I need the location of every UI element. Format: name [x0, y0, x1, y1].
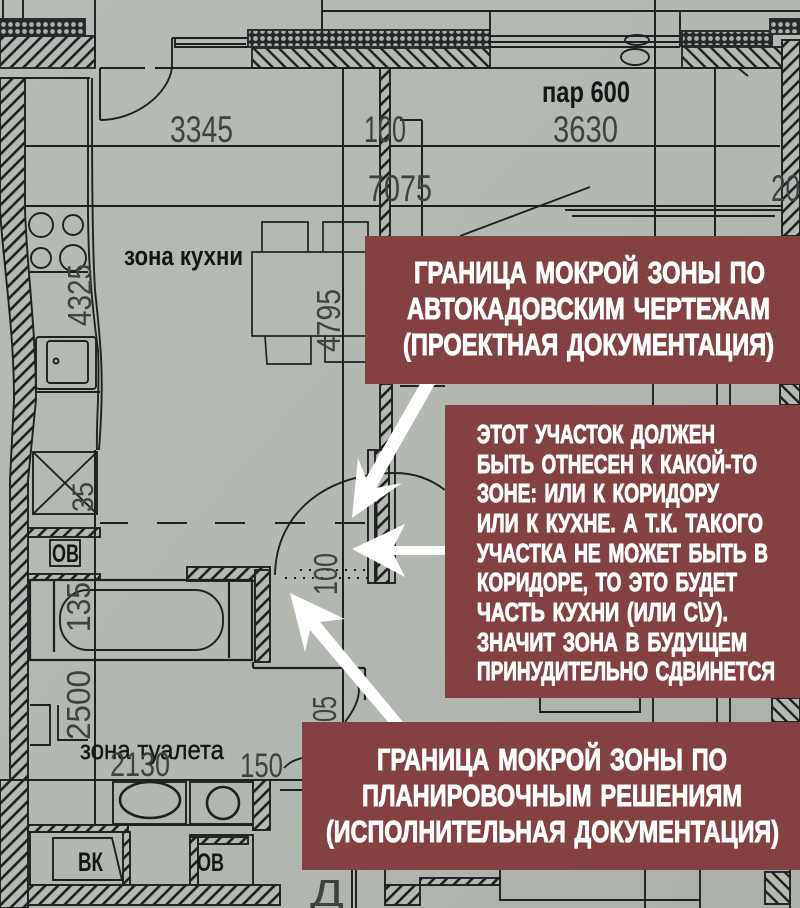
- dimension: 4325 vertical: 4325: [61, 264, 98, 326]
- callout: middle box: [445, 405, 800, 698]
- arrow: lower, to planning boundary: [290, 593, 403, 722]
- callout: middle box: ЗОНЕ: ИЛИ К КОРИДОРУ: [477, 480, 720, 508]
- bathroom fixtures: [0, 450, 365, 908]
- label: зона туалета: зона туалета: [80, 735, 225, 765]
- label: ВК: ВК: [78, 847, 103, 877]
- arrow: middle, to the disputed area: [352, 524, 445, 577]
- door arc top: [100, 38, 172, 120]
- dimension: 2500 vertical: 2500: [60, 670, 97, 740]
- right wall: [782, 40, 800, 236]
- dimension: 3345: 3345: [170, 109, 233, 150]
- dimension: 05 vertical: 05: [306, 696, 343, 722]
- callout: middle box: ЧАСТЬ КУХНИ (ИЛИ С\У).: [477, 599, 728, 627]
- dimension: 7075: 7075: [368, 168, 432, 209]
- dimension: 100 vertical: 100: [307, 553, 344, 595]
- central wall: [368, 384, 395, 583]
- label: зона кухни: зона кухни: [124, 241, 243, 271]
- dimension lines: [25, 146, 800, 206]
- callout: top box: [365, 236, 800, 384]
- left curved wall and kitchen counter: [0, 68, 102, 780]
- top walls: [0, 0, 800, 68]
- label: пар 600: пар 600: [542, 76, 630, 109]
- table and chairs: [252, 222, 382, 364]
- lower right plan fragments: [280, 384, 800, 908]
- label: ОВ lower: ОВ: [197, 849, 224, 877]
- door arc bath: [275, 473, 445, 575]
- label: ОВ upper: ОВ: [52, 540, 79, 568]
- callout: middle box: ЭТОТ УЧАСТОК ДОЛЖЕН: [477, 421, 715, 449]
- callout: bottom box: [302, 722, 800, 870]
- dashed zone line: [100, 522, 365, 524]
- dimension: 2130: 2130: [110, 746, 170, 784]
- dimension: 100 top: 100: [364, 109, 406, 150]
- arrow: upper, to drawing boundary: [352, 384, 435, 518]
- dimension: 3630: 3630: [553, 109, 618, 150]
- dimension: 4795 vertical: 4795: [310, 289, 347, 352]
- dimension: 35 vertical: 35: [67, 482, 100, 512]
- dimension: 135 vertical: 135: [60, 582, 97, 632]
- dimension: 150: 150: [240, 747, 283, 785]
